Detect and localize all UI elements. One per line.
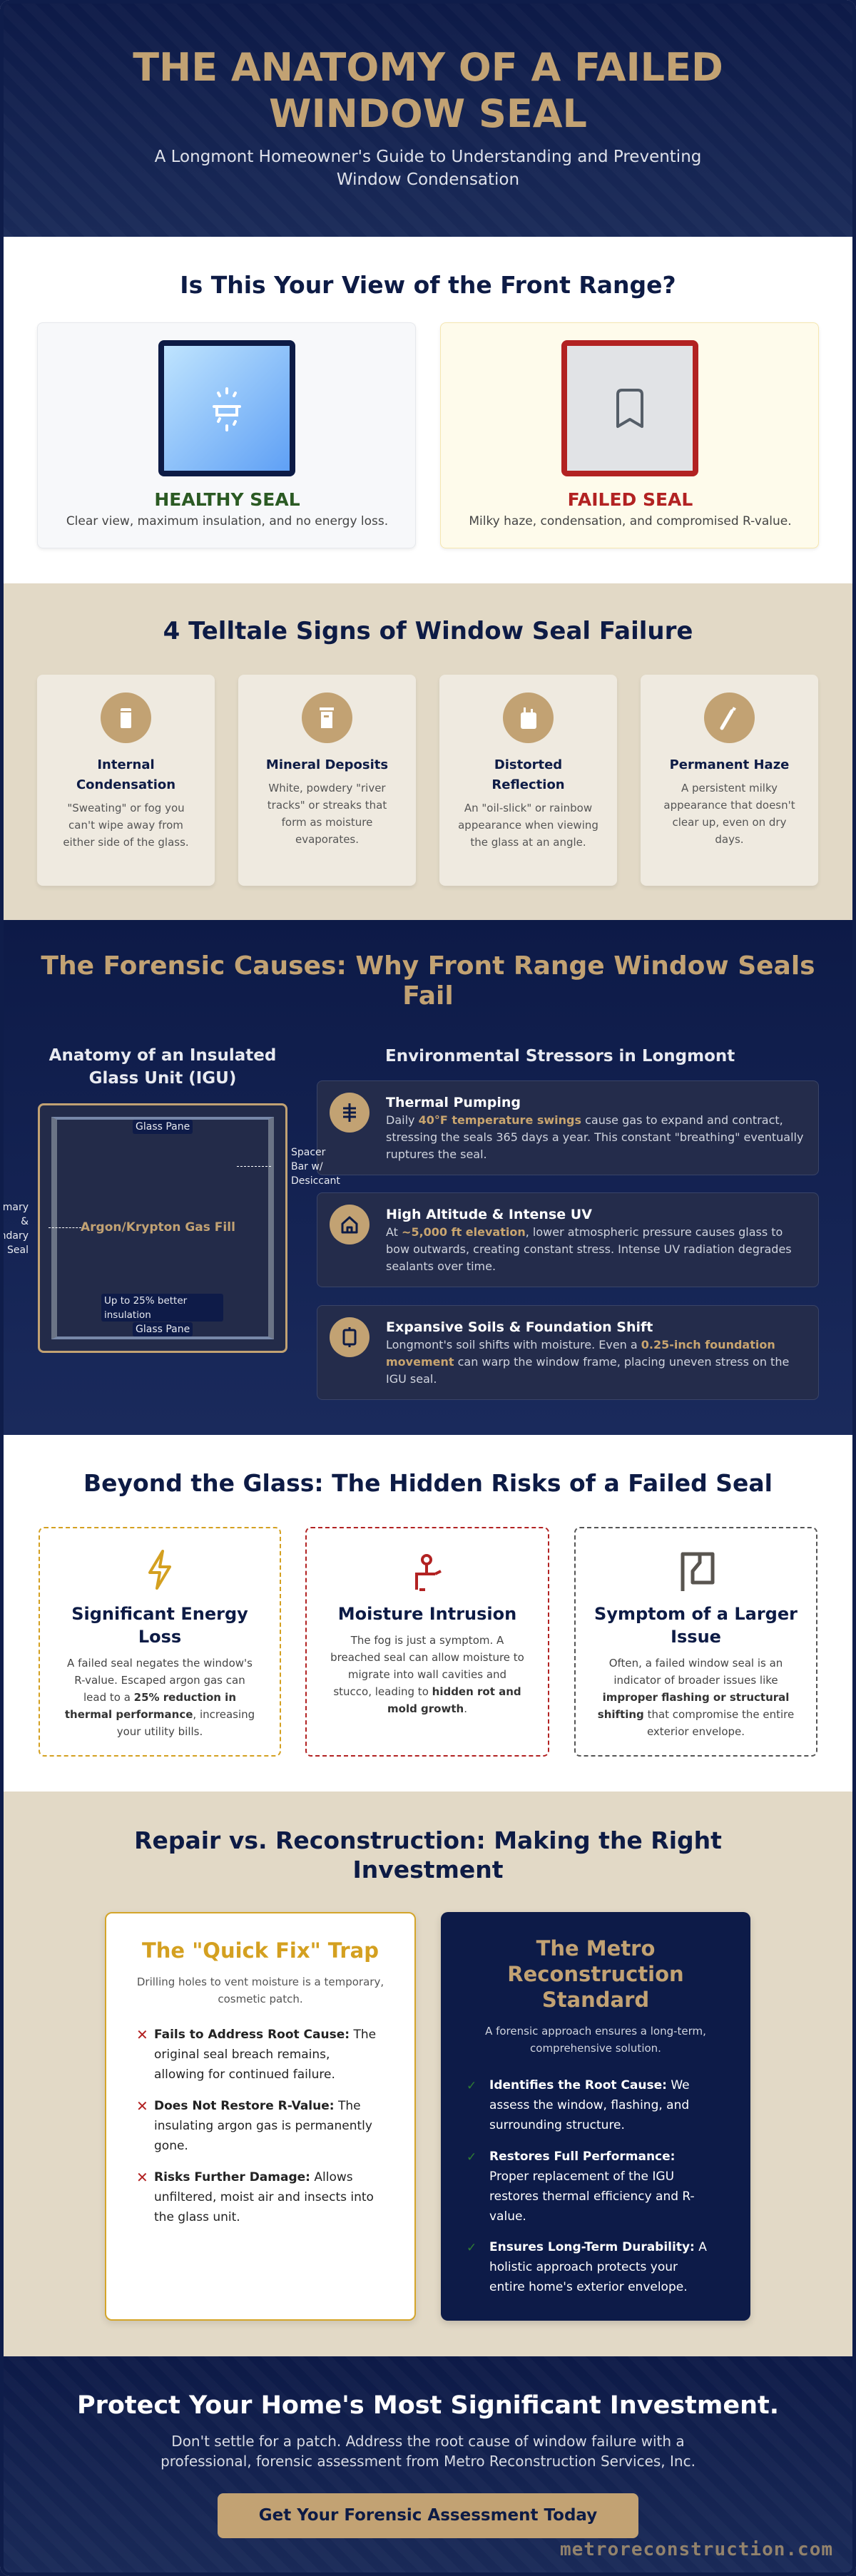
icon bbox=[704, 692, 755, 743]
icon bbox=[302, 692, 352, 743]
list: drawbacks: Does Not Restore R-Value: The insulating argon gas is permanently gone. bbox=[154, 2099, 372, 2153]
panel: failed seal bbox=[440, 322, 819, 548]
description: Clear view, maximum insulation, and no energy loss. bbox=[66, 514, 388, 528]
card: permanent haze: A persistent milky appearance that doesn't clear up, even on dry days. bbox=[663, 782, 795, 846]
label: insulation: Up to 25% better insulation bbox=[104, 1295, 187, 1321]
label: HEALTHY SEAL bbox=[154, 489, 300, 510]
card: distorted reflection: Reflection bbox=[491, 777, 565, 792]
panel: metro standard: Standard bbox=[542, 1988, 649, 2012]
list: benefits: ✓ bbox=[467, 2241, 477, 2255]
label: glass pane bottom: Glass Pane bbox=[136, 1324, 190, 1335]
section: repair vs reconstruction bbox=[0, 1792, 856, 2356]
card: mineral deposits: Mineral Deposits bbox=[266, 757, 388, 772]
section: front range view bbox=[0, 237, 856, 583]
card: distorted reflection bbox=[439, 675, 617, 886]
stressor: thermal pumping: Thermal Pumping bbox=[386, 1095, 521, 1110]
footer url: metroreconstruction.com bbox=[560, 2539, 833, 2560]
card: distorted reflection: An "oil-slick" or rainbow appearance when viewing the glass at an angle. bbox=[458, 802, 598, 849]
card: moisture: The fog is just a symptom. A breached seal can allow moisture to migrate into wall cavities and stucco, leading to hidden rot and mold growth. bbox=[330, 1634, 524, 1715]
panel: metro standard bbox=[441, 1912, 750, 2321]
label: spacer bbox=[291, 1147, 340, 1187]
text: Don't settle for a patch. Address the root cause of window failure with a professional, forensic assessment from Metro Reconstruction Services, Inc. bbox=[160, 2433, 696, 2470]
heading: Beyond the Glass: The Hidden Risks of a Failed Seal bbox=[83, 1469, 773, 1497]
heading: Is This Your View of the Front Range? bbox=[180, 271, 676, 299]
card: permanent haze: Permanent Haze bbox=[670, 757, 789, 772]
subtitle: A Longmont Homeowner's Guide to Understanding and Preventing bbox=[155, 148, 701, 166]
label: spacer: Bar w/ bbox=[291, 1161, 323, 1172]
section: telltale signs bbox=[0, 583, 856, 920]
button bbox=[218, 2493, 638, 2538]
panel: metro standard: Reconstruction bbox=[507, 1962, 684, 1986]
title: WINDOW SEAL bbox=[269, 91, 587, 136]
list: drawbacks bbox=[136, 2026, 376, 2224]
panel: quick fix bbox=[105, 1912, 416, 2321]
label: FAILED SEAL bbox=[568, 489, 693, 510]
label: seal: Seal bbox=[7, 1244, 29, 1256]
label: spacer: Spacer bbox=[291, 1147, 325, 1158]
panel: metro standard: A forensic approach ensures a long-term, comprehensive solution. bbox=[485, 2025, 706, 2055]
section: call to action bbox=[0, 2356, 856, 2576]
stressor: altitude: At ~5,000 ft elevation, lower atmospheric pressure causes glass to bow outwards, creating constant stress. Intense UV radiation degrades sealants over time. bbox=[386, 1225, 792, 1273]
header bbox=[0, 0, 856, 237]
panel: quick fix: Drilling holes to vent moisture is a temporary, cosmetic patch. bbox=[137, 1976, 384, 2005]
card: larger issue: Symptom of a Larger bbox=[594, 1604, 798, 1624]
icon bbox=[101, 692, 151, 743]
card: distorted reflection: Distorted bbox=[494, 757, 562, 772]
label: gas fill: Argon/Krypton Gas Fill bbox=[81, 1220, 235, 1235]
stressor: altitude: High Altitude & Intense UV bbox=[386, 1207, 592, 1222]
card: energy loss bbox=[39, 1527, 281, 1757]
title bbox=[133, 45, 723, 136]
heading: 4 Telltale Signs of Window Seal Failure bbox=[163, 617, 693, 645]
icon bbox=[330, 1093, 370, 1133]
title: THE ANATOMY OF A FAILED bbox=[133, 45, 723, 90]
panel: quick fix: The "Quick Fix" Trap bbox=[142, 1938, 379, 1963]
section: hidden risks bbox=[0, 1435, 856, 1792]
label: seal bbox=[0, 1202, 29, 1256]
subtitle bbox=[154, 148, 701, 189]
list: drawbacks: ✕ bbox=[136, 2169, 148, 2186]
icon: clear window bbox=[158, 340, 295, 476]
label: spacer: Desiccant bbox=[291, 1175, 340, 1187]
label: seal: & bbox=[21, 1216, 29, 1227]
stressor: thermal pumping bbox=[317, 1080, 819, 1175]
stressor: altitude bbox=[317, 1192, 819, 1287]
subtitle: Window Condensation bbox=[337, 170, 519, 189]
stressor: thermal pumping: Daily 40°F temperature swings cause gas to expand and contract, stressing the seals 365 days a year. This constant "breathing" eventually ruptures the seal. bbox=[386, 1113, 803, 1161]
list: drawbacks: ✕ bbox=[136, 2097, 148, 2115]
card: energy loss: A failed seal negates the window's R-value. Escaped argon gas can lead to a 25% reduction in thermal performance, increasing your utility bills. bbox=[65, 1657, 255, 1738]
card: energy loss: Loss bbox=[138, 1627, 181, 1647]
card: internal condensation: "Sweating" or fog you can't wipe away from either side of the glass. bbox=[63, 802, 189, 849]
icon: lightning bbox=[148, 1550, 171, 1590]
heading: Repair vs. Reconstruction: Making the Right Investment bbox=[134, 1826, 722, 1884]
card: moisture bbox=[305, 1527, 549, 1757]
list: drawbacks: ✕ bbox=[136, 2026, 148, 2043]
icon: fogged window bbox=[561, 340, 698, 476]
list: benefits: ✓ bbox=[467, 2150, 477, 2164]
list: benefits: Ensures Long-Term Durability: A holistic approach protects your entire home's exterior envelope. bbox=[489, 2240, 707, 2294]
diagram: IGU bbox=[0, 1103, 340, 1353]
icon bbox=[330, 1317, 370, 1357]
list: benefits bbox=[467, 2078, 707, 2294]
card: mineral deposits bbox=[238, 675, 416, 886]
heading: The Forensic Causes: Why Front Range Window Seals Fail bbox=[41, 951, 815, 1011]
stressor: soils: Longmont's soil shifts with moisture. Even a 0.25-inch foundation movement can warp the window frame, placing uneven stress on the IGU seal. bbox=[386, 1338, 789, 1386]
card: moisture: Moisture Intrusion bbox=[338, 1604, 516, 1624]
subheading: stressors: Environmental Stressors in Longmont bbox=[385, 1047, 735, 1065]
list: benefits: Identifies the Root Cause: We assess the window, flashing, and surrounding structure. bbox=[489, 2078, 690, 2132]
panel: metro standard: The Metro bbox=[536, 1936, 655, 1961]
card: permanent haze bbox=[641, 675, 818, 886]
label: insulation bbox=[101, 1294, 223, 1322]
section: forensic causes bbox=[0, 920, 856, 1435]
card: internal condensation bbox=[37, 675, 215, 886]
card: mineral deposits: White, powdery "river tracks" or streaks that form as moisture evaporates. bbox=[268, 782, 387, 846]
card: internal condensation: Condensation bbox=[76, 777, 175, 792]
card: larger issue bbox=[574, 1527, 817, 1757]
label: glass pane top: Glass Pane bbox=[136, 1121, 190, 1133]
list: benefits: Restores Full Performance: Proper replacement of the IGU restores thermal efficiency and R-value. bbox=[489, 2150, 695, 2224]
card: energy loss: Significant Energy bbox=[71, 1604, 248, 1624]
icon: figure bbox=[415, 1554, 442, 1591]
stressor: soils: Expansive Soils & Foundation Shift bbox=[386, 1319, 653, 1335]
card: larger issue: Issue bbox=[671, 1627, 721, 1647]
icon: flag bbox=[681, 1552, 715, 1591]
list: drawbacks: Fails to Address Root Cause: The original seal breach remains, allowing for continued failure. bbox=[154, 2028, 376, 2082]
heading: Protect Your Home's Most Significant Investment. bbox=[77, 2391, 779, 2420]
panel: healthy seal bbox=[37, 322, 416, 548]
list: drawbacks: Risks Further Damage: Allows unfiltered, moist air and insects into the glass unit. bbox=[154, 2170, 374, 2224]
button: Get Your Forensic Assessment Today bbox=[259, 2506, 597, 2525]
card: larger issue: Often, a failed window seal is an indicator of broader issues like improper flashing or structural shifting that compromise the entire exterior envelope. bbox=[598, 1657, 794, 1738]
card: internal condensation: Internal bbox=[97, 757, 155, 772]
subheading: IGU: Anatomy of an Insulated Glass Unit (IGU) bbox=[49, 1046, 276, 1088]
stressor: soils bbox=[317, 1305, 819, 1400]
icon bbox=[330, 1205, 370, 1244]
list: benefits: ✓ bbox=[467, 2079, 477, 2093]
icon bbox=[503, 692, 554, 743]
description: Milky haze, condensation, and compromised R-value. bbox=[469, 514, 792, 528]
